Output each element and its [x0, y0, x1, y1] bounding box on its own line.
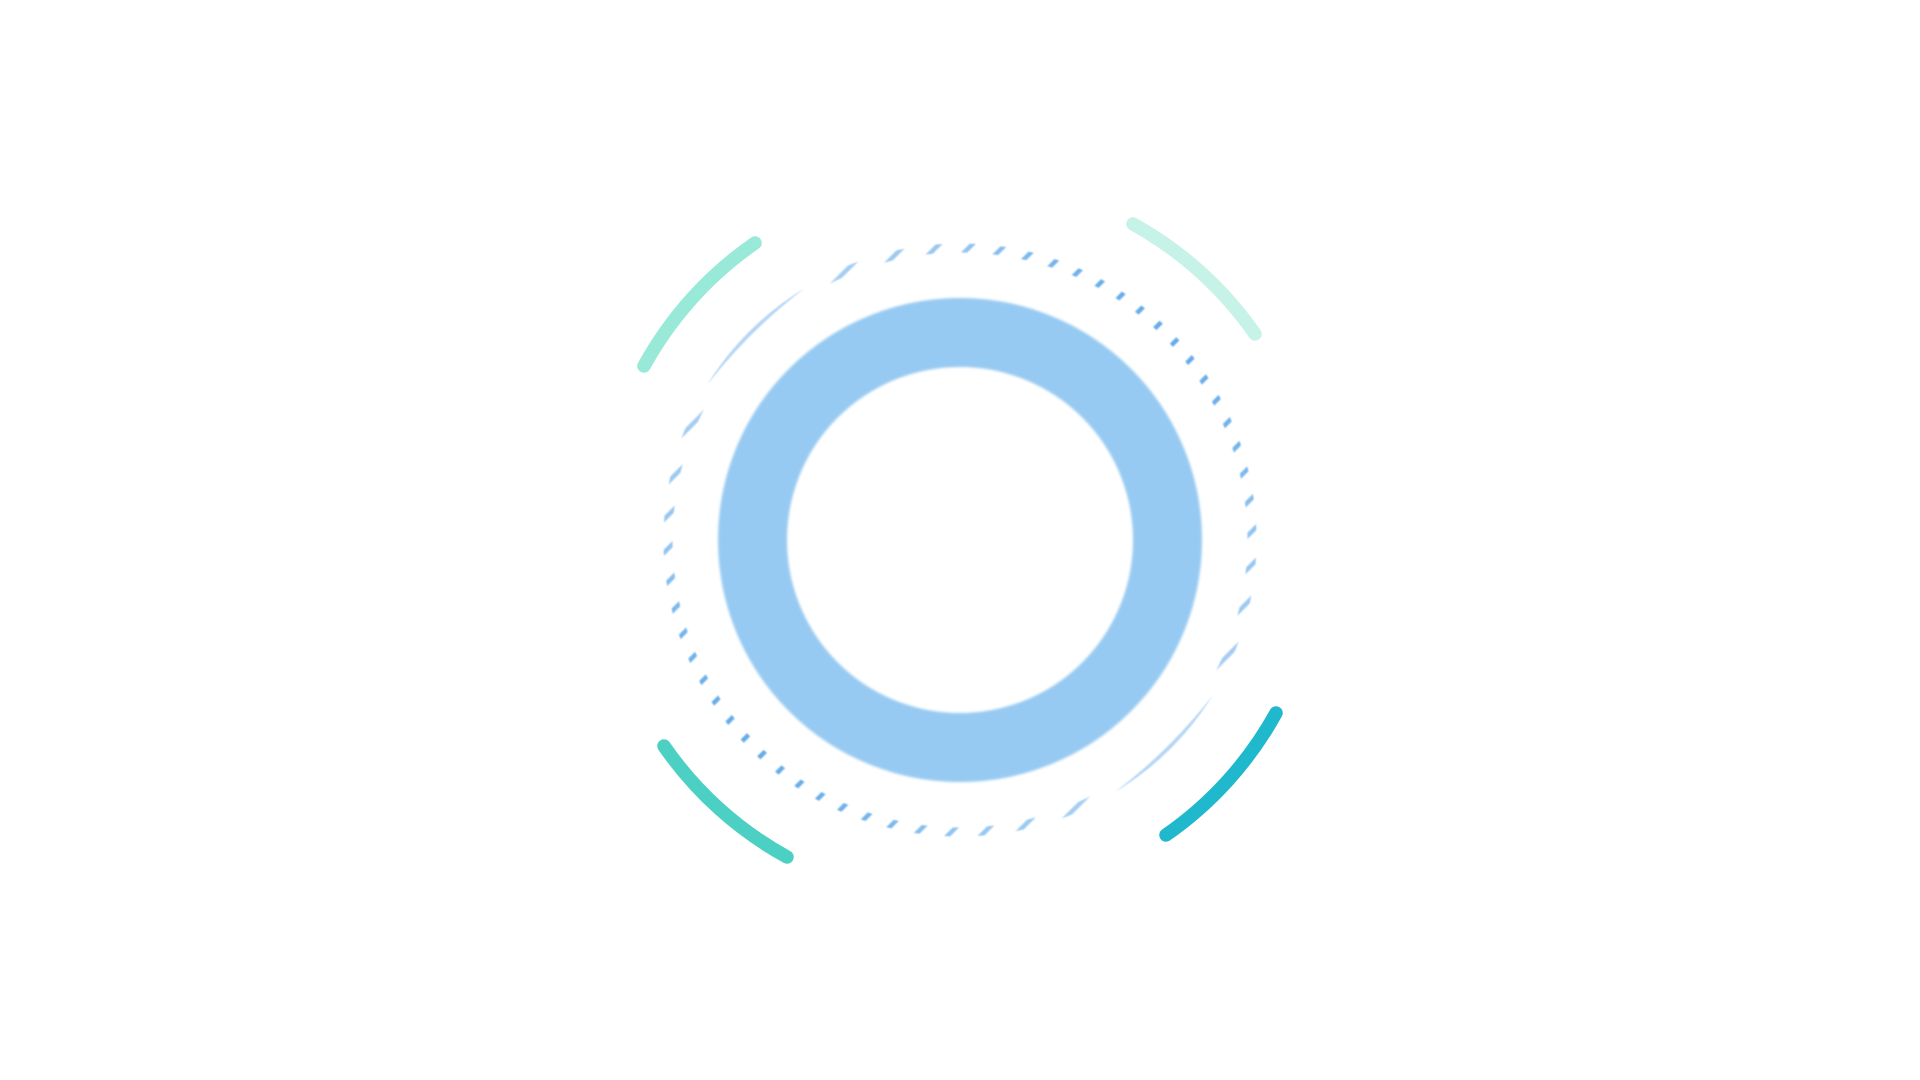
- dashed outer ring: [662, 242, 1258, 838]
- arc: bottom left: [664, 746, 787, 857]
- arc: bottom right: [1166, 713, 1276, 835]
- thick blue ring: [752, 332, 1168, 748]
- ring graphic: [637, 217, 1283, 864]
- arc: top left: [644, 243, 755, 366]
- arc: top right: [1133, 224, 1255, 334]
